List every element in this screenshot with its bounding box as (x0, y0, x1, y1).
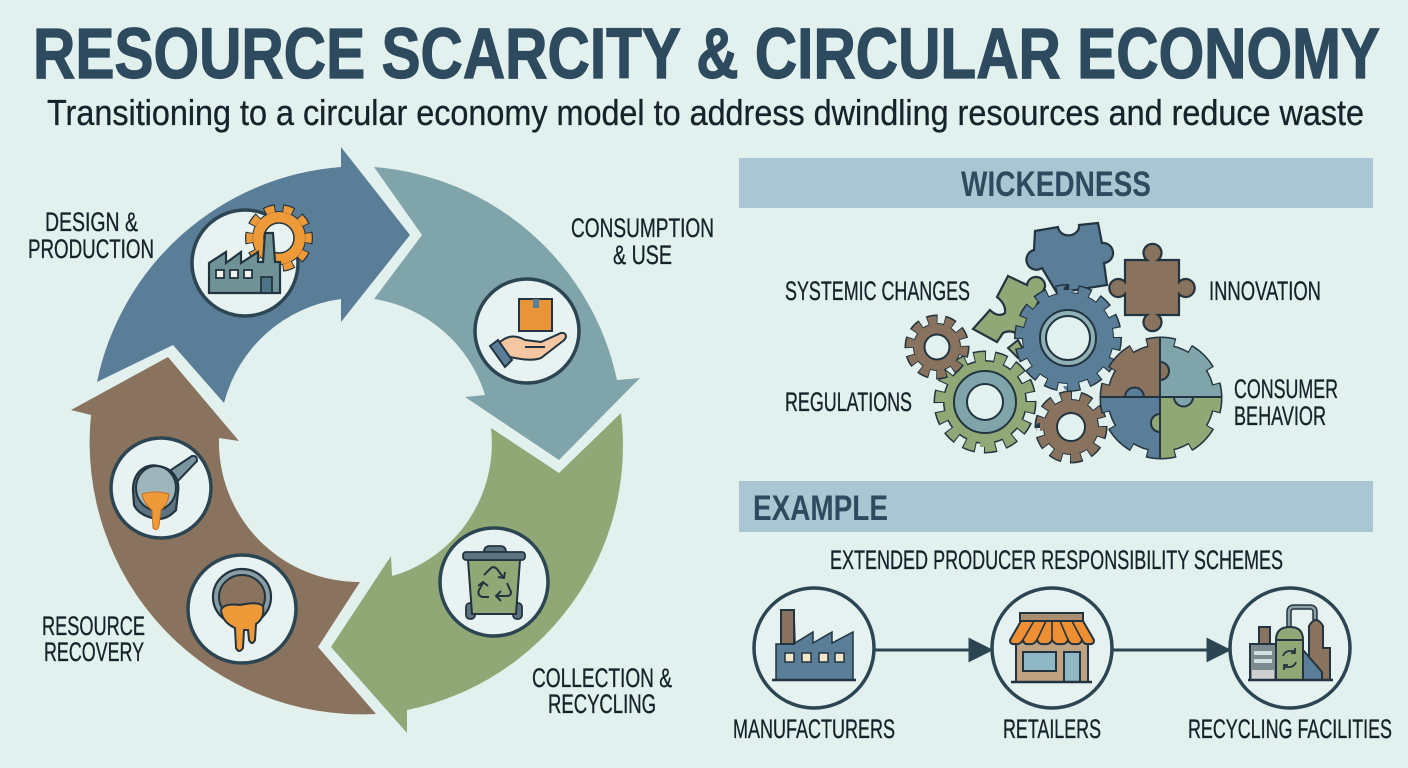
gear: bottom brown (1040, 396, 1102, 458)
panel: wickedness (739, 158, 1373, 458)
panel: example (733, 481, 1392, 744)
puzzle knob: blue (1125, 388, 1144, 397)
puzzle piece: green (973, 276, 1045, 358)
icon: recycling facility (1230, 588, 1350, 708)
label: consumption and use: & USE (613, 240, 672, 270)
label: consumption and use: CONSUMPTION (571, 213, 714, 243)
heading: example: EXAMPLE (753, 489, 888, 528)
label: design and production: DESIGN & (45, 207, 138, 237)
puzzle piece: brown (1109, 244, 1195, 331)
label: consumption and use (571, 213, 714, 270)
label: collection and recycling: RECYCLING (548, 689, 656, 719)
icon: manufacturer factory (754, 588, 874, 708)
label: consumer behavior: BEHAVIOR (1234, 401, 1326, 431)
puzzle knob: green (1151, 414, 1160, 432)
label: systemic changes: SYSTEMIC CHANGES (785, 276, 970, 306)
icon: retail shop (992, 588, 1112, 708)
panel: circular economy cycle (28, 147, 714, 733)
icon: recycling bin (440, 528, 548, 636)
gear: large blue (1020, 290, 1116, 386)
label: retailers: RETAILERS (1003, 714, 1101, 744)
label: collection and recycling (532, 663, 672, 719)
illustration: gears and puzzle pieces (910, 223, 1222, 458)
label: consumer behavior: CONSUMER (1234, 374, 1338, 404)
arrow: consumption and use (374, 167, 640, 460)
arrow: design and production (97, 147, 410, 403)
arrow: collection and recycling (331, 413, 623, 733)
label: design and production (28, 207, 154, 264)
icon: factory and gear (192, 208, 308, 316)
gear: green (940, 357, 1030, 447)
label: resource recovery: RECOVERY (44, 637, 144, 667)
label: regulations: REGULATIONS (785, 387, 912, 417)
heading: wickedness (739, 158, 1373, 208)
arrow: resource recovery (71, 357, 376, 714)
arrow: retailers to recycling facilities (1113, 640, 1228, 660)
puzzle piece: blue (1026, 223, 1113, 293)
label: collection and recycling: COLLECTION & (532, 663, 672, 693)
puzzle knob: teal (1174, 397, 1193, 406)
heading: wickedness: WICKEDNESS (961, 165, 1151, 204)
puzzle knob: brown (1160, 362, 1169, 380)
label: resource recovery (42, 611, 145, 667)
arrow: manufacturers to retailers (875, 640, 990, 660)
label: manufacturers: MANUFACTURERS (733, 714, 895, 744)
icon: crucible of molten metal (188, 555, 296, 663)
heading: example (739, 481, 1373, 532)
gear: small brown (910, 320, 964, 374)
label: resource recovery: RESOURCE (42, 611, 145, 641)
label: design and production: PRODUCTION (28, 234, 154, 264)
gear: four-piece puzzle (1100, 338, 1222, 458)
label: consumer behavior (1234, 374, 1338, 431)
icon: hand holding box (475, 279, 579, 383)
icon: ladle pouring (111, 438, 211, 538)
label: innovation: INNOVATION (1209, 276, 1321, 306)
